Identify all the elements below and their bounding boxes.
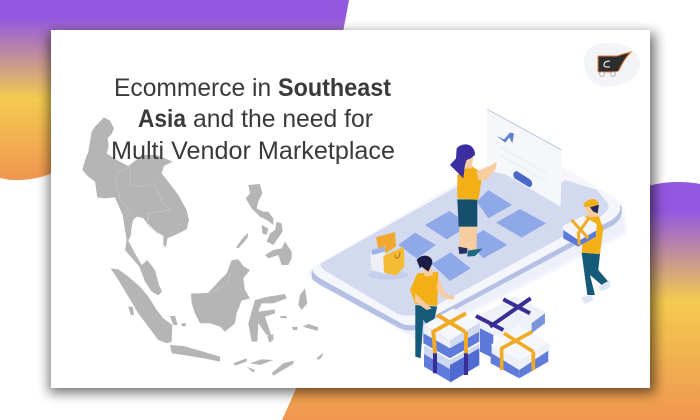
Timor and lesser islands xyxy=(233,358,247,366)
shopping bags xyxy=(368,232,408,280)
icon: shopping cart xyxy=(598,52,631,76)
Palawan xyxy=(236,233,248,248)
logo blob xyxy=(584,43,640,87)
right front box xyxy=(491,325,548,362)
Visayas and Mindanao xyxy=(267,222,283,245)
man xyxy=(410,256,455,358)
back box with purple ribbon xyxy=(476,297,545,340)
delivery man xyxy=(563,199,611,304)
product card xyxy=(487,109,562,207)
title: Multi Vendor Marketplace xyxy=(111,137,395,165)
internal borders xyxy=(115,167,230,295)
background blob: top left xyxy=(0,0,349,180)
title: and the need for xyxy=(193,105,373,133)
Borneo xyxy=(191,259,250,332)
title: Asia xyxy=(138,105,187,133)
app tiles xyxy=(398,190,546,281)
phone shadow xyxy=(307,170,627,340)
ecommerce illustration xyxy=(307,109,627,383)
Java xyxy=(170,345,220,362)
card shadow xyxy=(49,33,655,393)
gift boxes xyxy=(423,297,548,383)
Sulawesi xyxy=(248,294,287,342)
icon: shoe xyxy=(497,133,514,143)
button xyxy=(513,171,532,187)
phone body xyxy=(312,163,622,330)
title: Ecommerce in xyxy=(114,74,278,102)
white card xyxy=(51,30,650,388)
logo xyxy=(584,43,640,87)
woman xyxy=(450,144,497,257)
mainland Southeast Asia xyxy=(82,117,189,295)
title: Southeast xyxy=(278,74,392,102)
Sumatra xyxy=(111,268,172,343)
background blob: bottom right xyxy=(282,182,700,420)
Luzon xyxy=(246,184,273,225)
map of Southeast Asia xyxy=(82,117,323,376)
left stacked box xyxy=(423,308,479,341)
